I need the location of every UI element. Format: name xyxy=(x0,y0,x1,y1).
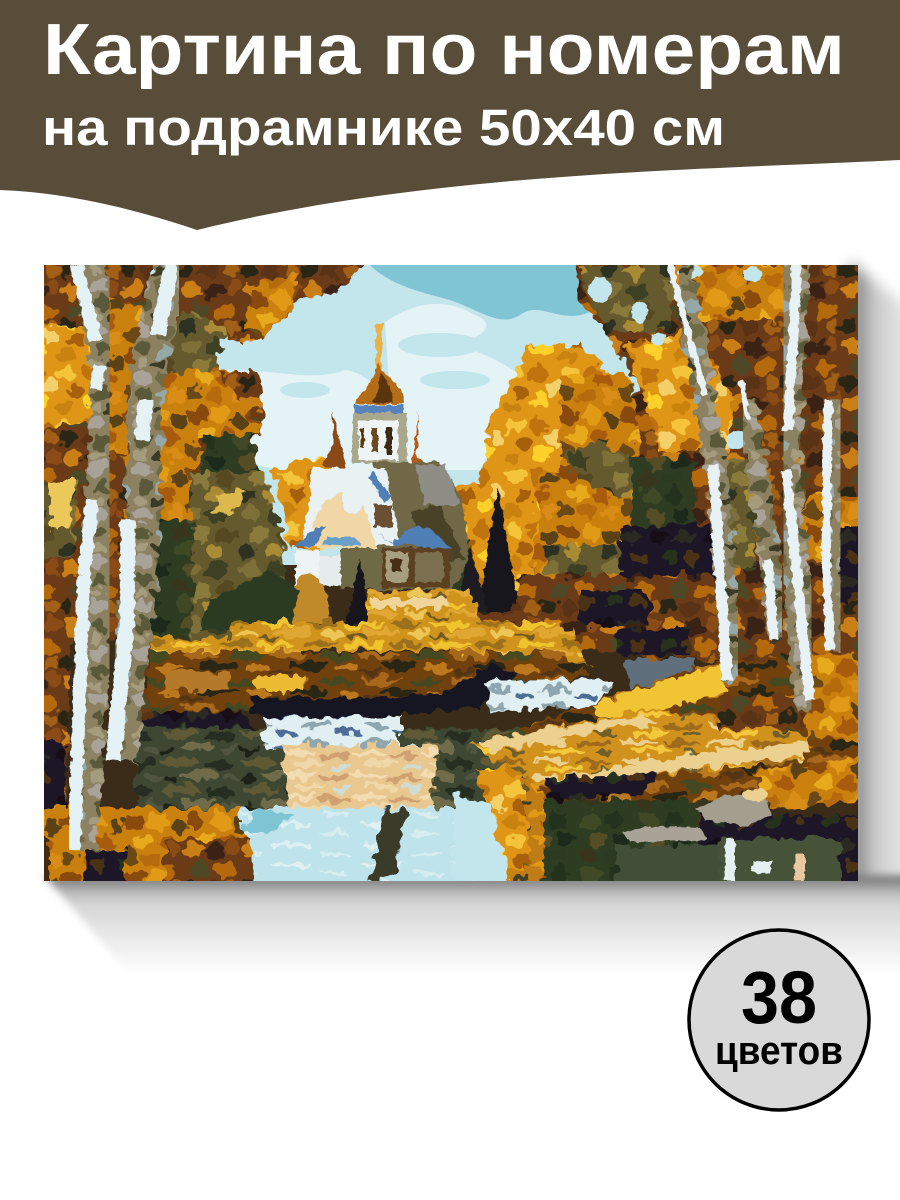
right foliage mass xyxy=(556,265,858,664)
subtitle: на подрамнике 50x40 см xyxy=(42,99,725,156)
left foliage mass xyxy=(44,265,364,642)
painting: autumn church by the river xyxy=(44,265,858,881)
right bank with sunlit path xyxy=(469,650,858,881)
lower-left foliage and bank xyxy=(44,638,254,881)
river water xyxy=(135,660,695,900)
sky gaps through right foliage xyxy=(150,265,762,449)
sky and clouds xyxy=(200,265,660,565)
painting base xyxy=(64,565,858,818)
badge number: 38 xyxy=(741,956,817,1039)
birch trunks xyxy=(74,240,840,850)
river rocks xyxy=(622,789,805,881)
right birches xyxy=(670,265,840,710)
header banner xyxy=(0,0,900,230)
meadow and river banks xyxy=(130,575,720,742)
church xyxy=(293,323,470,590)
spruces and dark forest xyxy=(200,487,520,630)
title: Картина по номерам xyxy=(43,10,845,90)
badge label: цветов xyxy=(715,1029,843,1073)
background trees xyxy=(273,345,650,640)
badge: 38 colours xyxy=(689,930,869,1110)
left birches xyxy=(74,240,176,850)
canvas drop shadow xyxy=(44,262,900,985)
